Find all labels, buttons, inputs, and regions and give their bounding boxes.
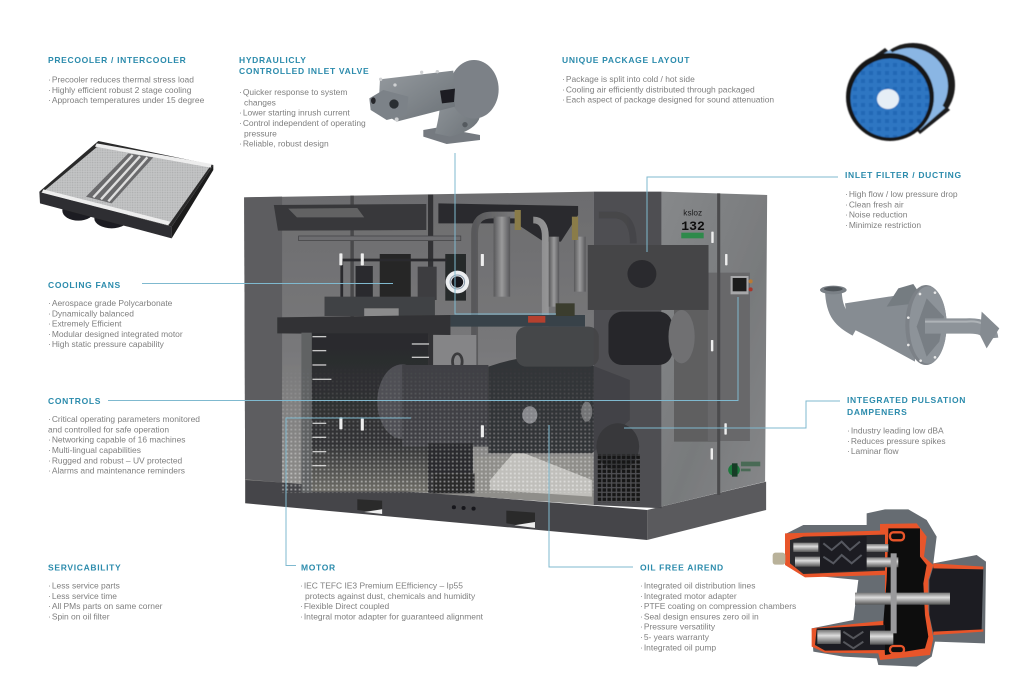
machine dark side band	[594, 192, 662, 508]
text: hydraulicly controlled inlet valve	[239, 55, 369, 149]
text: inlet filter / ducting	[845, 170, 962, 230]
machine internals: shelf, racks, motor	[277, 271, 630, 502]
text: oil free airend: ·Integrated oil distribution lines	[640, 580, 755, 590]
text: unique package layout: ·Each aspect of package designed for sound attenuation	[562, 95, 774, 105]
machine base	[245, 478, 766, 540]
text: servicability	[48, 562, 163, 621]
text: precooler / intercooler	[48, 55, 205, 105]
text: cooling fans: ·Dynamically balanced	[48, 308, 134, 318]
text: servicability: ·All PMs parts on same corner	[48, 601, 163, 611]
text: oil free airend: OIL FREE AIREND	[640, 562, 724, 572]
machine model badge	[681, 208, 705, 238]
machine model badge: ksloz	[683, 208, 702, 217]
machine front panel	[244, 192, 594, 505]
text: hydraulicly controlled inlet valve: ·Reliable, robust design	[239, 139, 329, 149]
text: precooler / intercooler: ·Highly efficient robust 2 stage cooling	[48, 85, 192, 95]
text: integrated pulsation dampeners: DAMPENERS	[847, 407, 907, 417]
text: unique package layout: ·Cooling air efficiently distributed through packaged	[562, 84, 755, 94]
text: precooler / intercooler: ·Approach temperatures under 15 degree	[48, 95, 205, 105]
text: hydraulicly controlled inlet valve: HYDRAULICLY	[239, 55, 307, 65]
text: hydraulicly controlled inlet valve: CONTROLLED INLET VALVE	[239, 66, 369, 76]
text: inlet filter / ducting: ·High flow / low pressure drop	[845, 189, 958, 199]
image: oil free airend cutaway	[773, 509, 986, 667]
text: motor: protects against dust, chemicals and humidity	[305, 591, 476, 601]
text: motor: ·Integral motor adapter for guaranteed alignment	[300, 611, 484, 621]
text: inlet filter / ducting: ·Clean fresh air	[845, 199, 904, 209]
text: controls: and controlled for safe operation	[48, 424, 169, 434]
text: unique package layout: UNIQUE PACKAGE LAYOUT	[562, 55, 690, 65]
image: inlet filter	[846, 43, 955, 141]
text: motor: MOTOR	[301, 562, 336, 572]
machine brand logo	[728, 462, 760, 477]
machine: perforated dot pattern	[281, 367, 594, 493]
text: inlet filter / ducting: ·Minimize restriction	[845, 220, 921, 230]
text: oil free airend: ·Pressure versatility	[640, 622, 716, 632]
text: integrated pulsation dampeners: INTEGRATED PULSATION	[847, 395, 966, 405]
text: unique package layout: ·Package is split into cold / hot side	[562, 74, 695, 84]
text: servicability: ·Spin on oil filter	[48, 611, 110, 621]
text: controls: ·Critical operating parameters monitored	[48, 414, 200, 424]
text: hydraulicly controlled inlet valve: ·Control independent of operating	[239, 118, 366, 128]
machine: compressor package	[244, 192, 767, 540]
text: controls	[48, 396, 200, 476]
text: inlet filter / ducting: INLET FILTER / DUCTING	[845, 170, 962, 180]
text: hydraulicly controlled inlet valve: pressure	[244, 128, 277, 138]
text: hydraulicly controlled inlet valve: changes	[244, 97, 276, 107]
text: oil free airend	[640, 562, 796, 652]
text: unique package layout	[562, 55, 774, 105]
machine side panel	[588, 192, 767, 510]
machine white latches	[339, 232, 727, 460]
text: oil free airend: ·Integrated oil pump	[640, 642, 716, 652]
text: servicability: SERVICABILITY	[48, 562, 121, 572]
text: precooler / intercooler: ·Precooler reduces thermal stress load	[48, 74, 194, 84]
text: inlet filter / ducting: ·Noise reduction	[845, 210, 908, 220]
text: precooler / intercooler: PRECOOLER / INTERCOOLER	[48, 55, 186, 65]
text: cooling fans: ·High static pressure capability	[48, 339, 165, 349]
text: integrated pulsation dampeners: ·Industry leading low dBA	[847, 426, 944, 436]
text: oil free airend: ·Seal design ensures zero oil in	[640, 611, 759, 621]
text: controls: ·Rugged and robust – UV protected	[48, 455, 183, 465]
text: integrated pulsation dampeners: ·Reduces pressure spikes	[847, 436, 946, 446]
text: integrated pulsation dampeners	[847, 395, 966, 456]
text: cooling fans: ·Modular designed integrated motor	[48, 329, 183, 339]
text: oil free airend: ·PTFE coating on compression chambers	[640, 601, 796, 611]
text: integrated pulsation dampeners: ·Laminar flow	[847, 446, 900, 456]
text: motor: ·IEC TEFC IE3 Premium EEfficiency – Ip55	[300, 580, 463, 590]
text: motor: ·Flexible Direct coupled	[300, 601, 389, 611]
text: servicability: ·Less service time	[48, 591, 117, 601]
image: inlet valve	[369, 60, 499, 144]
machine model badge: 132	[681, 219, 705, 234]
text: controls: ·Alarms and maintenance reminders	[48, 466, 185, 476]
text: cooling fans: COOLING FANS	[48, 280, 121, 290]
text: servicability: ·Less service parts	[48, 580, 120, 590]
text: cooling fans	[48, 280, 183, 349]
text: oil free airend: ·Integrated motor adapter	[640, 591, 737, 601]
text: controls: CONTROLS	[48, 396, 101, 406]
text: controls: ·Networking capable of 16 machines	[48, 435, 185, 445]
machine internals: upper rack and pipes	[274, 203, 633, 415]
leader lines	[108, 153, 840, 567]
text: oil free airend: ·5- years warranty	[640, 632, 710, 642]
text: cooling fans: ·Aerospace grade Polycarbonate	[48, 298, 173, 308]
text: cooling fans: ·Extremely Efficient	[48, 319, 122, 329]
text: controls: ·Multi-lingual capabilities	[48, 445, 141, 455]
image: pulsation dampener	[820, 284, 999, 365]
image: precooler	[39, 141, 213, 238]
text: motor	[300, 562, 484, 621]
text: hydraulicly controlled inlet valve: ·Lower starting inrush current	[239, 108, 350, 118]
text: hydraulicly controlled inlet valve: ·Quicker response to system	[239, 87, 347, 97]
